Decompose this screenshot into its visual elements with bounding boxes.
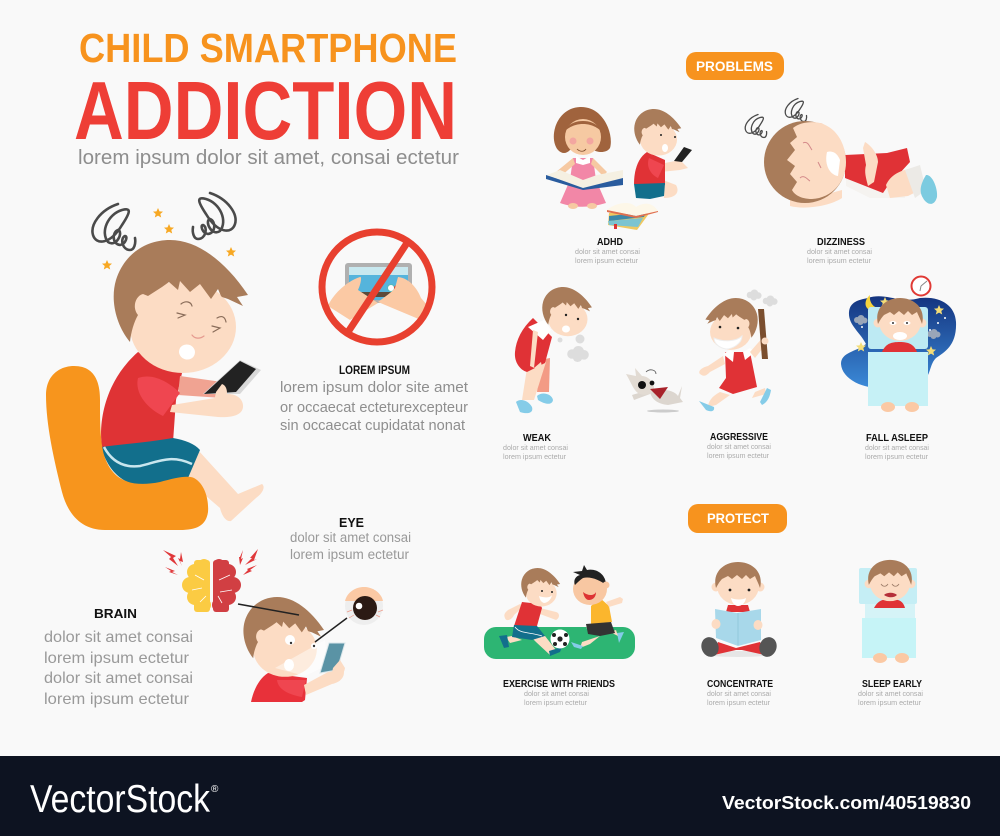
sleepless boy [874,298,926,352]
dog [626,368,683,412]
label: lorem ipsum ectetur [858,698,921,707]
head [114,240,248,373]
item: weak [503,287,592,461]
title: ADDICTION [74,64,457,157]
no phone sign [322,232,432,342]
text: eye: dolor sit amet consai [290,530,411,545]
pill: protect [688,504,787,533]
pill: protect: PROTECT [707,511,770,526]
boy bent over [515,287,592,413]
label: FALL ASLEEP [866,433,928,444]
clock [912,276,930,296]
item: exercise with friends [484,565,635,707]
boy in yellow [571,565,624,649]
swirls and stars [92,193,236,270]
label: DIZZINESS [817,237,865,248]
title: lorem ipsum dolor sit amet, consai ectetur [78,147,459,169]
label: ADHD [597,237,623,248]
soccer ball [550,630,570,648]
icon: brain with lightning [163,549,258,612]
feet [881,402,919,412]
item: concentrate [699,562,779,707]
leg [185,450,264,521]
label: lorem ipsum ectetur [865,452,928,461]
books [607,203,658,230]
swirls [745,98,807,138]
item: fall asleep [841,276,956,461]
label: CONCENTRATE [707,679,773,690]
shorts [101,438,200,486]
footer band: ® [211,784,219,795]
sleeve [137,376,180,416]
boy with phone [634,109,692,199]
label [807,237,872,265]
label [858,679,923,707]
label: EXERCISE WITH FRIENDS [503,679,615,690]
label [707,679,773,707]
image id: VectorStock.com/40519830 [722,792,971,813]
night background [841,296,956,388]
label: SLEEP EARLY [862,679,922,690]
label: dolor sit amet consai [807,247,872,256]
pillow [868,307,928,349]
boy lying down [764,121,937,208]
label [503,679,615,707]
text: lorem ipsum: sin occaecat cupidatat nonat [280,418,465,434]
phone [203,360,261,394]
item: dizziness [745,98,937,265]
label [707,432,771,460]
text: lorem ipsum [280,365,468,434]
boy in red [499,568,562,656]
label: lorem ipsum ectetur [807,256,871,265]
text: brain: dolor sit amet consai [44,670,193,687]
blanket [868,352,928,406]
chair [46,366,208,530]
pill: problems: PROBLEMS [696,59,773,74]
text: eye: EYE [339,515,364,530]
boy reading book [699,562,779,659]
label: dolor sit amet consai [503,443,568,452]
text: brain: dolor sit amet consai [44,629,193,646]
text: brain: lorem ipsum ectetur [44,650,190,667]
title [74,25,459,169]
title: CHILD SMARTPHONE [79,25,457,71]
text: brain: BRAIN [94,606,137,621]
moon and stars [854,295,946,356]
label: lorem ipsum ectetur [524,698,587,707]
label: dolor sit amet consai [858,689,923,698]
arm [178,376,222,398]
text: lorem ipsum: LOREM IPSUM [339,365,410,377]
label [503,433,568,461]
girl reading [546,107,623,209]
green field [484,627,635,659]
item: ADHD [546,107,692,265]
boy sleeping in bed [859,560,917,663]
shirt [101,352,182,448]
illustration: dizzy boy on chair with phone [46,193,264,530]
label: dolor sit amet consai [707,689,771,698]
label: AGGRESSIVE [710,432,768,443]
logo: VectorStock [30,778,210,821]
label: lorem ipsum ectetur [707,698,770,707]
label: dolor sit amet consai [575,247,640,256]
label: lorem ipsum ectetur [707,451,769,460]
text: brain [44,606,193,708]
label: dolor sit amet consai [707,442,771,451]
label: lorem ipsum ectetur [575,256,638,265]
label [865,433,929,461]
item: aggressive [626,290,778,460]
label: lorem ipsum ectetur [503,452,566,461]
text: eye: lorem ipsum ectetur [290,547,409,562]
label: dolor sit amet consai [524,689,589,698]
label [575,237,640,265]
pill: problems [686,52,784,80]
label: WEAK [523,433,552,444]
illustration: boy looking at phone with eye detail [238,587,383,702]
running boy [699,290,778,411]
closed eyes and mouth [177,302,226,338]
footer band [0,756,1000,836]
label: dolor sit amet consai [865,443,929,452]
item: sleep early [858,560,923,707]
text: lorem ipsum: or occaecat ecteturexcepteur [280,400,468,416]
text: eye [290,515,411,562]
text: brain: lorem ipsum ectetur [44,691,190,708]
text: lorem ipsum: lorem ipsum dolor site amet [280,380,468,396]
